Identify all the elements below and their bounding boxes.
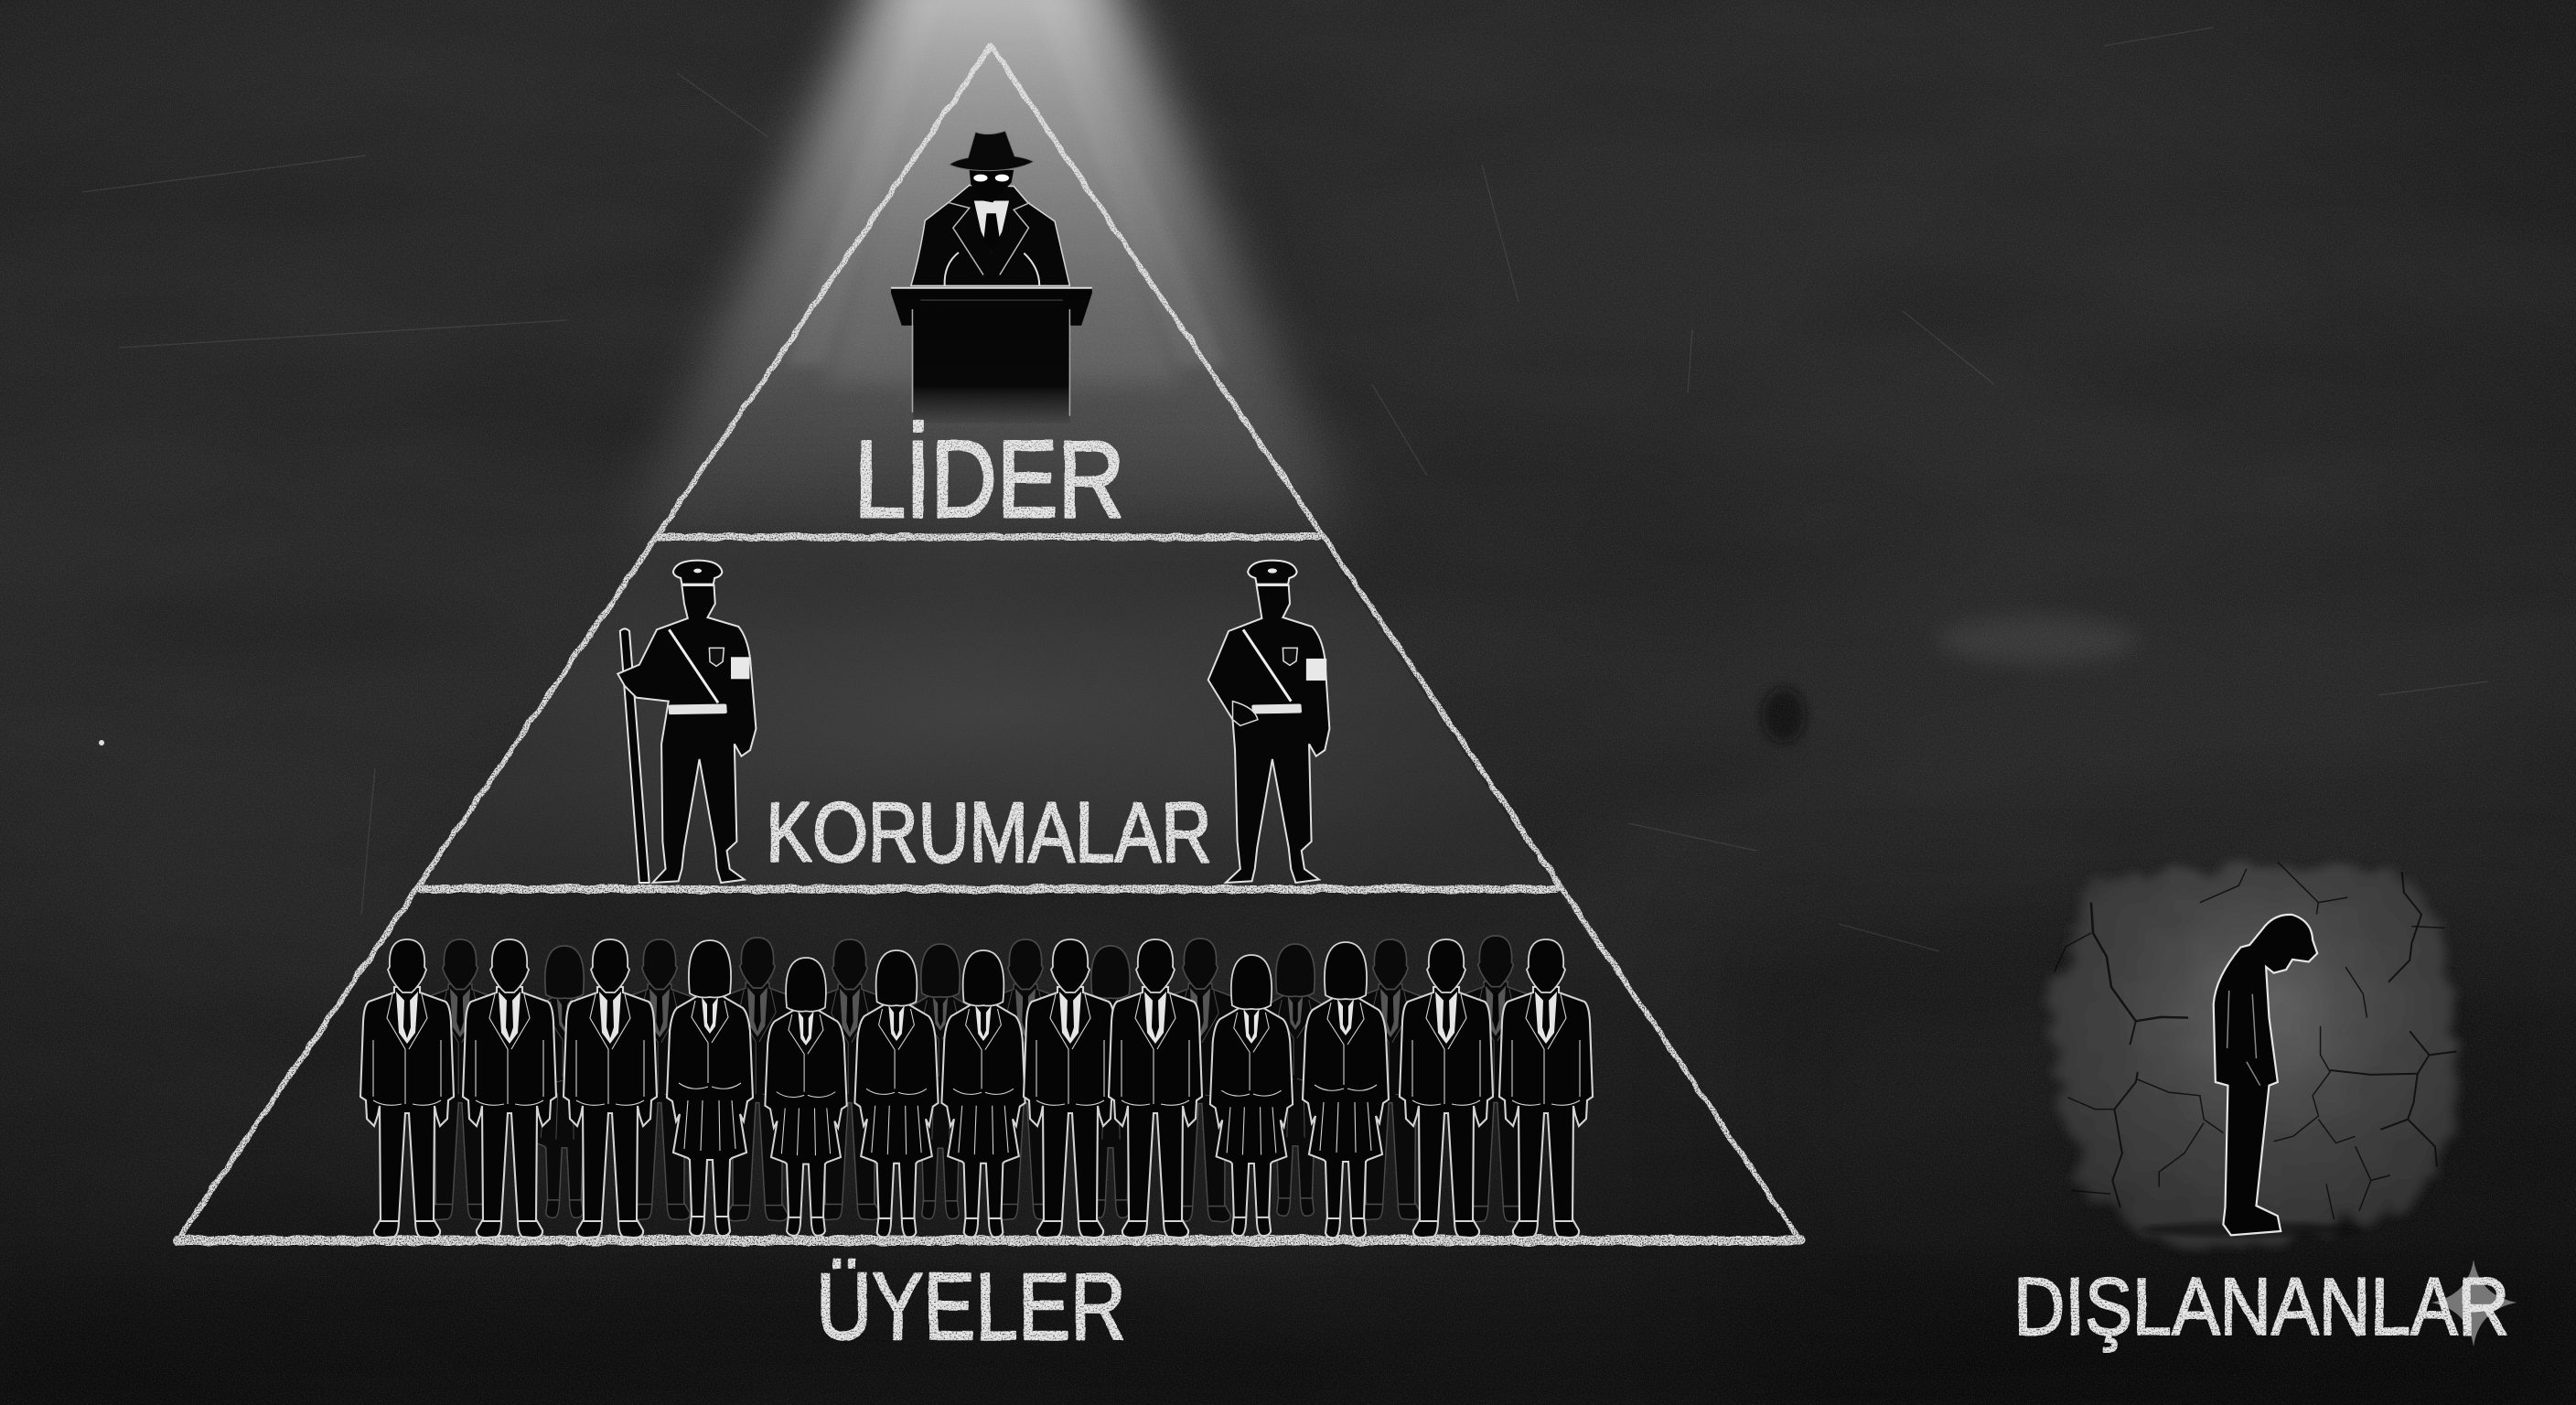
outcast silhouette [2214,915,2317,1235]
podium [891,288,1092,424]
label: DIŞLANANLAR: DIŞLANANLAR [2013,1260,2509,1352]
guard cap [673,561,722,585]
figure: leader at podium [891,131,1092,424]
label: KORUMALAR: KORUMALAR [766,785,1212,880]
staff [620,628,649,883]
belt [1251,703,1302,713]
sash [669,629,718,702]
members: front row [360,939,1593,1238]
pyramid tier shading [177,537,1800,1240]
pyramid outline [177,46,1800,1240]
ground shadow [2141,1222,2359,1237]
guard body [617,585,756,883]
label: ÜYELER: ÜYELER [816,1254,1126,1360]
guard cap [1248,561,1297,585]
leader coat [911,185,1069,285]
spotlight beam [622,0,1363,549]
armband [731,657,749,679]
leader shirt and tie [974,200,1009,253]
icon: sparkle watermark [2431,1260,2517,1346]
armband [1306,659,1326,681]
label: LİDER: LİDER [854,418,1124,541]
figure: right guard hand on hip [1208,561,1329,883]
leader lapels [949,202,1030,275]
cracked patch [2045,865,2460,1251]
sash [1243,629,1291,702]
panel: outcast cracked ground [2045,862,2460,1251]
belt [668,703,727,714]
cracks [2055,862,2456,1219]
figure: left guard with staff [617,561,756,883]
badge [709,648,724,666]
leader hat [950,131,1034,171]
leader head [970,170,1014,202]
members: back row [417,936,1539,1222]
badge [1283,648,1297,665]
leader eyes [973,175,1009,181]
guard body [1208,585,1329,883]
hand on hip [1233,702,1258,725]
outcast coat highlights [2227,991,2260,1086]
microphones [945,252,1039,285]
